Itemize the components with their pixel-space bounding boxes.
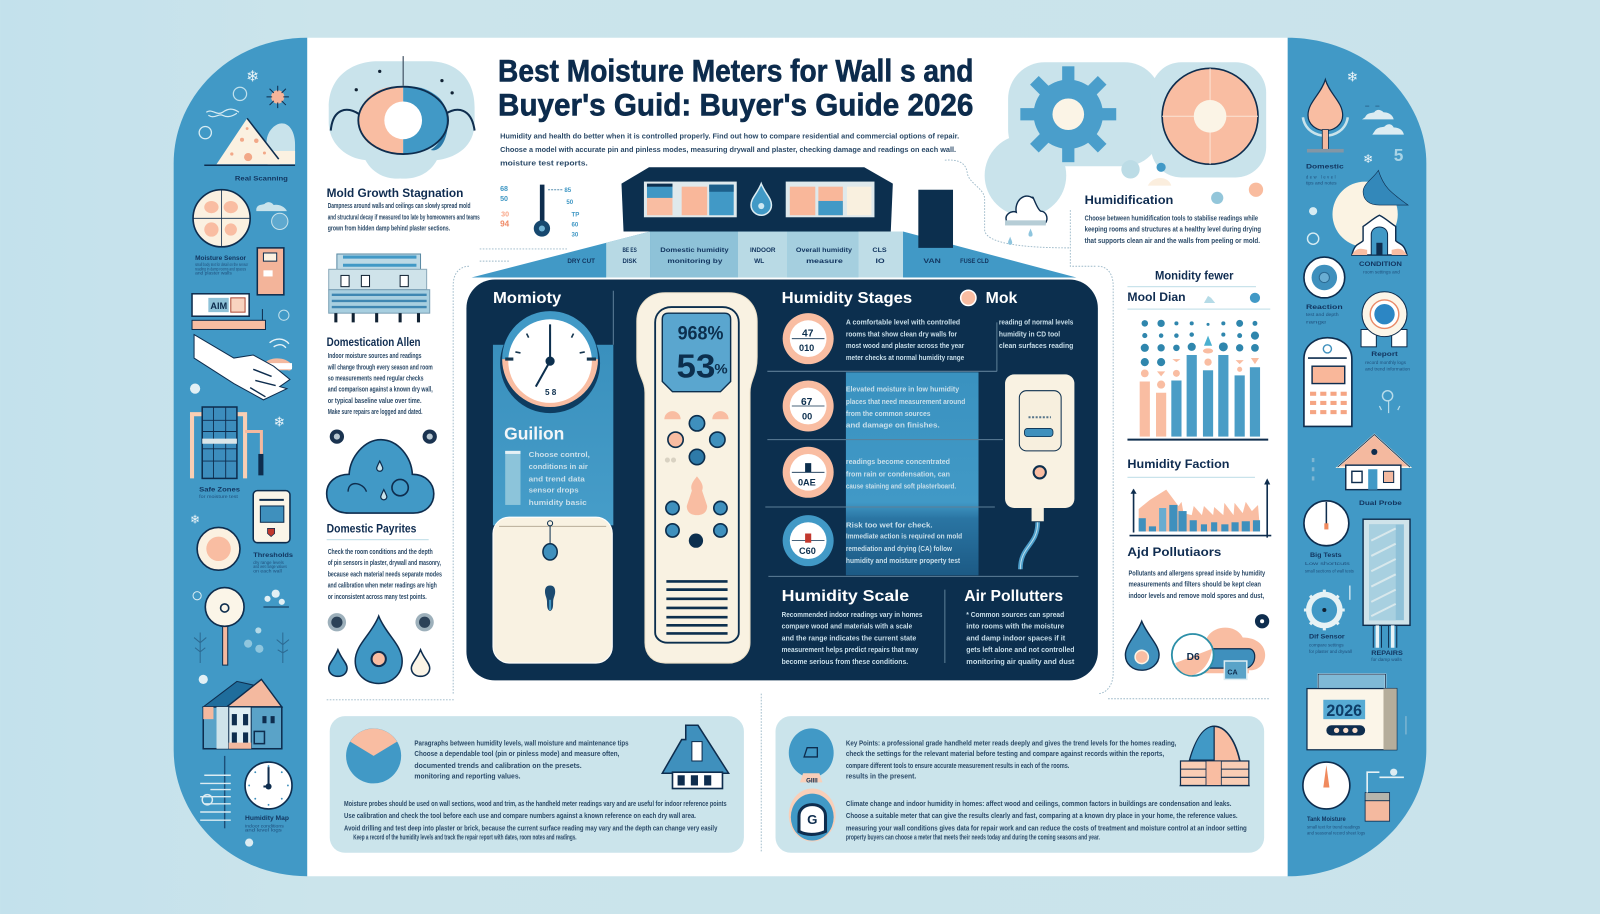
text: key features bottom: property buyers can choose a meter that meets their needs today and during the coming seasons and year. [846,833,1100,842]
panel: stage highlight [846,372,979,575]
right icon: small house [1313,435,1410,490]
left icon: window frame: ❄ [274,414,285,429]
heading: humidity faction [1127,458,1255,477]
text: domestication [327,351,433,416]
panel: bottom left info [330,716,744,853]
right icon: cream sun and arch house [1332,170,1408,255]
stage 2: Elevated moisture in low humidity [846,385,960,394]
left icon: ruler scale [200,756,231,828]
text: key features bottom [846,799,1247,842]
intro text: moisture test reports. [500,158,588,167]
stage 2: 67 [801,397,813,408]
left label 1: Real Scanning [235,176,288,183]
text: key features top: check the settings for the relevant material before testing and compare against records within the reports, [846,749,1164,758]
icon: weather cloud [1005,196,1047,245]
right icon: tall window [1363,519,1410,648]
text: key features top: Key Points: a professional grade handheld meter reads deeply and gives the trend levels for the homes reading, [846,739,1176,748]
stage 1 [783,313,1074,364]
heading: humidity fewer: Monidity fewer [1155,270,1234,283]
right label 9: and seasonal record sheet logs [1307,830,1365,835]
right label 9: small text for trend readings [1307,824,1360,829]
left icon: display bar: AIM [210,301,228,311]
right decorative weather: 5 [1394,145,1404,165]
house: blue roof band: BE ES [623,247,637,254]
right label 6: Big Tests [1310,552,1342,559]
icon: g badge [789,789,836,842]
icon: handheld moisture meter [637,293,757,663]
left icon: peach round [197,527,240,570]
left icon: clock [245,762,292,809]
right label 1: tips and notes [1306,181,1337,186]
text: domestication: Indoor moisture sources and readings [328,351,422,360]
house: blue roof band: WL [754,258,765,265]
intro text [500,132,959,167]
icon: cloud with donut [329,56,475,179]
text: humidity scale: compare wood and materials with a scale [782,621,912,630]
icon: right cloud with gear and dial [985,62,1266,216]
right label 4 [1365,351,1410,371]
stage 3: from rain or condensation, can [846,469,950,478]
right icon: peach drop on stand [1303,80,1348,153]
panel: dark main panel [466,280,1098,680]
right label 3 [1306,304,1343,324]
right icon: gear sensor [1361,292,1407,347]
left label 4: dry range levels [253,560,284,565]
text: demand: and calibration when meter readings are high [328,581,437,590]
left label 2: Moisture Sensor [195,255,247,262]
left label 5: indoor conditions [245,823,284,828]
icon: small thermometer with figures: TP [572,211,579,218]
text: paragraph block top: monitoring and reporting values. [414,771,520,780]
icon: wall switch [493,517,612,663]
left icon: segmented round dial [193,190,288,247]
right label 1 [1306,163,1345,186]
left icon: hand holding sensor [190,335,292,400]
left label 4 [253,552,294,573]
left icon: handheld card: ❄ [190,512,200,526]
heading: mold growth: Mold Growth Stagnation [327,187,463,200]
text: air polluters: gets left alone and not controlled [966,645,1075,654]
icon: small thermometer with figures [500,185,579,239]
text: mold growth: Dampness around walls and ceilings can slowly spread mold [328,201,471,210]
dotted guide lines [327,160,1270,853]
house: blue roof band: measure [806,258,844,265]
icon: small thermometer with figures: 30 [572,232,579,239]
text: paragraph block top: Paragraphs between humidity levels, wall moisture and maintenance tips [414,739,629,748]
text: guilion note: and trend data [529,474,586,483]
heading: humidity stages: Humidity Stages [782,290,912,307]
right label 3: Reaction [1306,304,1343,311]
text: paragraph block top [414,739,629,780]
house: blue roof band: monitoring by [667,258,723,265]
text: demand: Check the room conditions and the depth [328,547,433,556]
stage 1: humidity in CD tool [999,330,1060,339]
text: humidity scale: measurement helps predict repairs that may [782,645,919,654]
right label 1: Domestic [1306,163,1345,170]
left icon: magnifier probe [193,588,289,684]
heading: momioty: Momioty [493,290,562,307]
stage 4: remediation and drying (CA) follow [846,544,952,553]
stage 3: readings become concentrated [846,457,950,466]
house: blue roof band [472,232,1076,277]
stage 4 [783,515,963,566]
left icon: pyramid with spores [204,118,295,165]
stage 1: reading of normal levels [999,317,1073,326]
right label 4: and trend information [1365,366,1410,371]
icon: tent chart [1180,726,1249,785]
text: humidification: keeping rooms and structures at a healthy level during drying [1085,225,1261,234]
icon: drop and cloud gauge: D6 [1187,652,1200,663]
text: mold growth: grown from hidden damp behind plaster sections. [328,224,450,233]
icon: g badge: G [807,812,817,827]
right label 9 [1307,816,1365,835]
stage 4: humidity and moisture property test [846,556,961,565]
icon: drop and cloud gauge: CA [1227,668,1238,676]
house: blue roof band: Overall humidity [796,247,853,254]
icon: plug-in sensor [1005,374,1074,569]
icon: three drops [328,613,434,683]
text: paragraph block bottom: Avoid drilling and test deep into plaster or brick, because the current surface reading may vary and the depth can change very easily [344,823,718,832]
stage 1: meter checks at normal humidity range [846,353,964,362]
left icon: handheld card [190,491,290,543]
heading: domestication: Domestication Allen [327,336,421,349]
stage dividers [765,322,1078,663]
right decorative weather: ❄ [1347,70,1358,85]
left label 4: on each wall [253,568,282,573]
right label 3: range [1306,319,1328,324]
left label 2: reading in damp rooms and spaces [195,266,246,271]
text: key features top: results in the present. [846,771,916,780]
heading: humidity scale: Humidity Scale [782,588,909,605]
left label 3 [199,487,241,499]
text: paragraph block top: Choose a dependable tool (pin or pinless mode) and measure often, [414,749,619,758]
heading: air pollutants side: Ajd Pollutiaors [1127,546,1222,559]
left label 5 [245,815,289,847]
text: air pollutants side: indoor levels and remove mold spores and dust, [1128,591,1264,600]
house: blue roof band: FUSE CLD [960,258,989,265]
icon: small thermometer with figures: 60 [572,221,579,228]
right icon: calculator meter [1304,338,1400,426]
intro text: Choose a model with accurate pin and pinless modes, measuring drywall and plaster, checking damage and readings on each wall. [500,145,956,154]
title: Buyer's Guid: Buyer's Guide 2026 [498,86,973,122]
heading: mool dian [1127,287,1270,309]
stage 2: and damage on finishes. [846,420,940,429]
left icon: window frame [192,407,285,478]
text: demand [327,540,442,601]
right label 8: Dif Sensor [1309,634,1345,641]
stage 4: C60 [799,546,816,556]
icon: small thermometer with figures: 50 [566,199,574,206]
right label 4: record monthly logs [1365,360,1406,365]
text: air pollutants side [1128,568,1266,600]
text: air polluters: and damp indoor spaces if it [966,634,1066,643]
text: guilion note [505,450,590,507]
house: blue roof band: DISK [623,258,637,265]
heading: guilion: Guilion [504,424,564,444]
text: key features bottom: measuring your wall conditions gives data for repair work and can reduce the costs of treatment and moisture control at an indoor setting [846,823,1247,832]
text: humidification: Choose between humidification tools to stabilise readings while [1085,213,1258,222]
house: blue roof band: CLS [872,247,887,254]
right decorative weather: ❄ [1363,152,1373,166]
text: paragraph block top: documented trends and calibration on the presets. [414,761,582,770]
text: paragraph block bottom [344,799,727,842]
right label 9: Tank Moisture [1307,816,1346,823]
right label 5: Dual Probe [1359,500,1403,507]
text: domestication: Make sure repairs are logged and dated. [328,407,423,416]
icon: pie [346,728,401,783]
text: air pollutants side: measurements and filters should be kept clean [1128,580,1261,589]
right label 7: REPAIRS [1371,650,1403,657]
icon: small thermometer with figures: 50 [500,195,508,203]
left label 2: and plaster walls [195,270,232,275]
title: Best Moisture Meters for Wall s and [498,53,973,89]
heading: mool dian: Mool Dian [1127,291,1186,304]
text: domestication: and comparison against a known dry wall, [328,385,433,394]
text: domestication: will change through every season and room [327,362,433,371]
right label 6: small sections of wall tests [1305,568,1354,573]
house: blue roof band: INDOOR [750,247,776,254]
text: air polluters: monitoring air quality and dust [966,657,1075,666]
text: humidity scale: and the range indicates the current state [782,634,916,643]
house: blue roof band: Domestic humidity [660,247,729,254]
stage 4: Immediate action is required on mold [846,532,963,541]
stage 4: Risk too wet for check. [846,520,933,529]
text: humidity scale [782,610,922,666]
left label 3: Safe Zones [199,487,241,494]
left label 4: and wet range values [253,564,287,569]
icon: apartment building [329,254,430,322]
left label 2: small body text for detail on the sensor [195,262,249,267]
left label 4: Thresholds [253,552,294,559]
right icon: ring sensor [1304,257,1345,298]
text: guilion note: sensor drops [529,486,579,495]
heading: humidification: Humidification [1085,194,1173,207]
panel: white centre sheet [307,38,1288,876]
text: air pollutants side: Pollutants and allergens spread inside by humidity [1128,568,1266,577]
panel: bottom right info [776,716,1264,853]
panel: gauge section [493,291,613,525]
text: air polluters: * Common sources can spread [966,610,1065,619]
right label 2: CONDITION [1359,261,1402,268]
right label 3: test and depth [1306,312,1339,317]
left icon: house [203,679,282,749]
text: humidity scale: Recommended indoor readings vary in homes [782,610,922,619]
stage 2: 00 [802,411,812,421]
text: air polluters [966,610,1075,666]
legend: mok [961,290,1018,307]
house: blue roof band: VAN [923,258,941,265]
icon: small thermometer with figures: 85 [564,187,572,194]
house: blue roof band: DRY CUT [567,258,595,265]
right label 1: dew level [1306,175,1336,180]
left column: decorative particles [199,69,289,139]
right icon: machine with 2026 display [1307,674,1406,750]
icon: round gauge [500,311,600,413]
icon: small thermometer with figures: 30 [501,210,509,218]
heading: demand: Domestic Payrites [327,522,417,535]
icon: handheld moisture meter: % [714,361,728,377]
text: paragraph block bottom: Keep a record of the humidity levels and track the repair report with dates, room notes and readings. [353,833,577,842]
text: mold growth: and structural decay if measured too late by homeowners and teams [328,212,480,221]
icon: handheld moisture meter: 968% [678,323,723,345]
stage 3: 0AE [798,478,816,488]
text: paragraph block bottom: Use calibration and check the tool before each use and compare numbers against a known reference on each dry wall area. [344,811,696,820]
left label 5: Humidity Map [245,815,289,822]
right icon: clock [1304,501,1349,546]
text: air polluters: into rooms with the moisture [966,621,1064,630]
text: humidification: that supports clean air and the walls from peeling or mold. [1085,236,1260,245]
area chart: humidity faction [1129,478,1271,538]
icon: blue cloud with drops [327,429,437,513]
legend: mok: Mok [986,290,1018,307]
bar chart: humidity levels [1127,320,1268,440]
icon: blue badge [789,728,834,784]
icon: small thermometer with figures: 94 [500,219,510,228]
stage 2: from the common sources [846,409,931,418]
left label 5: and level logs [245,827,282,832]
stage 3: cause staining and soft plasterboard. [846,482,956,491]
icon: drop and cloud gauge [1125,614,1269,679]
icon: small house [662,725,729,789]
intro text: Humidity and health do better when it is controlled properly. Find out how to compare residential and commercial options of repair. [500,132,959,141]
text: mold growth [328,201,480,233]
text: humidification [1085,213,1261,245]
house: blue roof band: IO [875,258,885,265]
heading: air polluters: Air Pollutters [964,588,1063,605]
icon: round gauge: 5 8 [545,388,557,397]
right label 7: for damp walls [1371,657,1402,662]
text: guilion note: Choose control, [529,450,590,459]
left icon: peach device [257,248,284,295]
right decorative weather [1307,70,1404,244]
text: key features top [846,739,1176,780]
right label 8: compare settings [1309,643,1344,648]
text: guilion note: humidity basic [529,498,587,507]
right label 7 [1371,650,1403,662]
left column: decorative particles: ❄ [246,69,259,86]
right label 4: Report [1371,351,1398,358]
icon: handheld moisture meter: 53 [677,348,715,385]
title [498,53,973,122]
left icon: display bar [192,294,289,329]
right label 2 [1359,261,1402,274]
right icon: white gear [1304,586,1350,630]
icon: blue badge: GIIII [806,777,818,784]
text: guilion note: conditions in air [529,462,588,471]
stage 1: 010 [799,343,814,353]
text: demand: because each material needs separate modes [328,569,442,578]
right label 6: Low shortcuts [1305,561,1350,566]
stage 1: 47 [802,329,814,340]
stage 1: A comfortable level with controlled [846,317,961,326]
stage 1: rooms that show clean dry walls for [846,330,957,339]
heading: humidity faction: Humidity Faction [1127,458,1229,471]
text: humidity scale: become serious from these conditions. [782,657,908,666]
right label 2: room settings and [1363,269,1400,274]
text: demand: or inconsistent across many test points. [328,592,427,601]
stage 1: most wood and plaster across the year [846,341,964,350]
text: key features bottom: Choose a suitable meter that can give the results clearly and fast, comparing at a known dry place in your home, the reference values. [846,811,1238,820]
right label 8: for plaster and drywall [1309,649,1352,654]
right icon: machine with 2026 display: 2026 [1326,702,1362,720]
stage 1: clean surfaces reading [999,341,1074,350]
right label 8 [1309,634,1352,654]
stage 2 [783,380,966,431]
left label 3: for moisture test [199,494,239,499]
panel: left icon column [174,38,307,876]
stage 2: places that need measurement around [846,397,966,406]
text: key features top: compare different tools to ensure accurate measurement results in each of the rooms. [846,761,1069,770]
house: dark roof with windows [621,167,953,248]
text: demand: of pin sensors in plaster, drywall and masonry, [328,558,441,567]
right label 6 [1305,552,1354,573]
panel: right icon column [1288,38,1426,876]
text: domestication: so measurements need regular checks [328,373,424,382]
text: paragraph block bottom: Moisture probes should be used on wall sections, wood and trim, as the handheld meter readings vary and are useful for indoor reference points [344,799,727,808]
stage 3 [783,447,956,498]
icon: small thermometer with figures: 68 [500,185,508,193]
right icon: dial and cup [1303,762,1404,821]
text: key features bottom: Climate change and indoor humidity in homes: affect wood and ceilings, common factors in buildings are condensation and leaks. [846,799,1231,808]
text: domestication: or typical baseline value over time. [328,396,422,405]
left label 2 [195,255,249,275]
